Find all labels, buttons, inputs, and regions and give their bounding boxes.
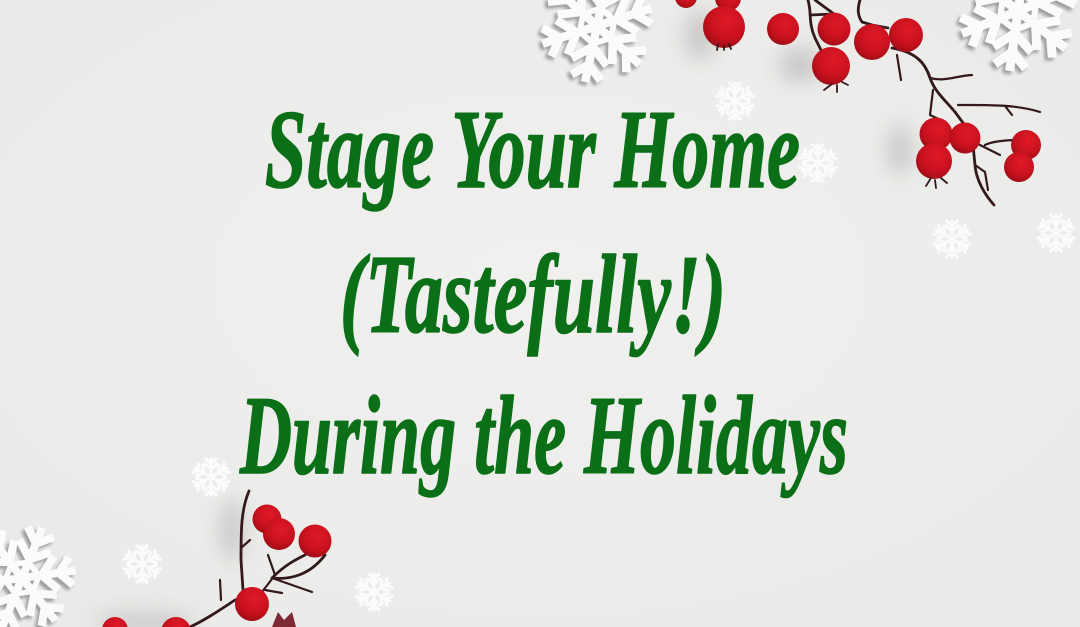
soft shadows under branches	[95, 9, 913, 627]
large snowflake: top centre	[534, 0, 660, 89]
large snowflake: bottom left	[0, 513, 87, 627]
small snowflakes	[123, 83, 1075, 610]
large snowflake: top right	[954, 0, 1080, 74]
berries: bottom left	[102, 504, 332, 627]
branch: top right	[808, 0, 1040, 205]
branch: bottom left	[190, 491, 325, 627]
title	[239, 88, 848, 498]
berries: top right	[675, 0, 1041, 188]
title line 2: (Tastefully!)	[340, 233, 726, 357]
title line 1: Stage Your Home	[265, 88, 800, 212]
